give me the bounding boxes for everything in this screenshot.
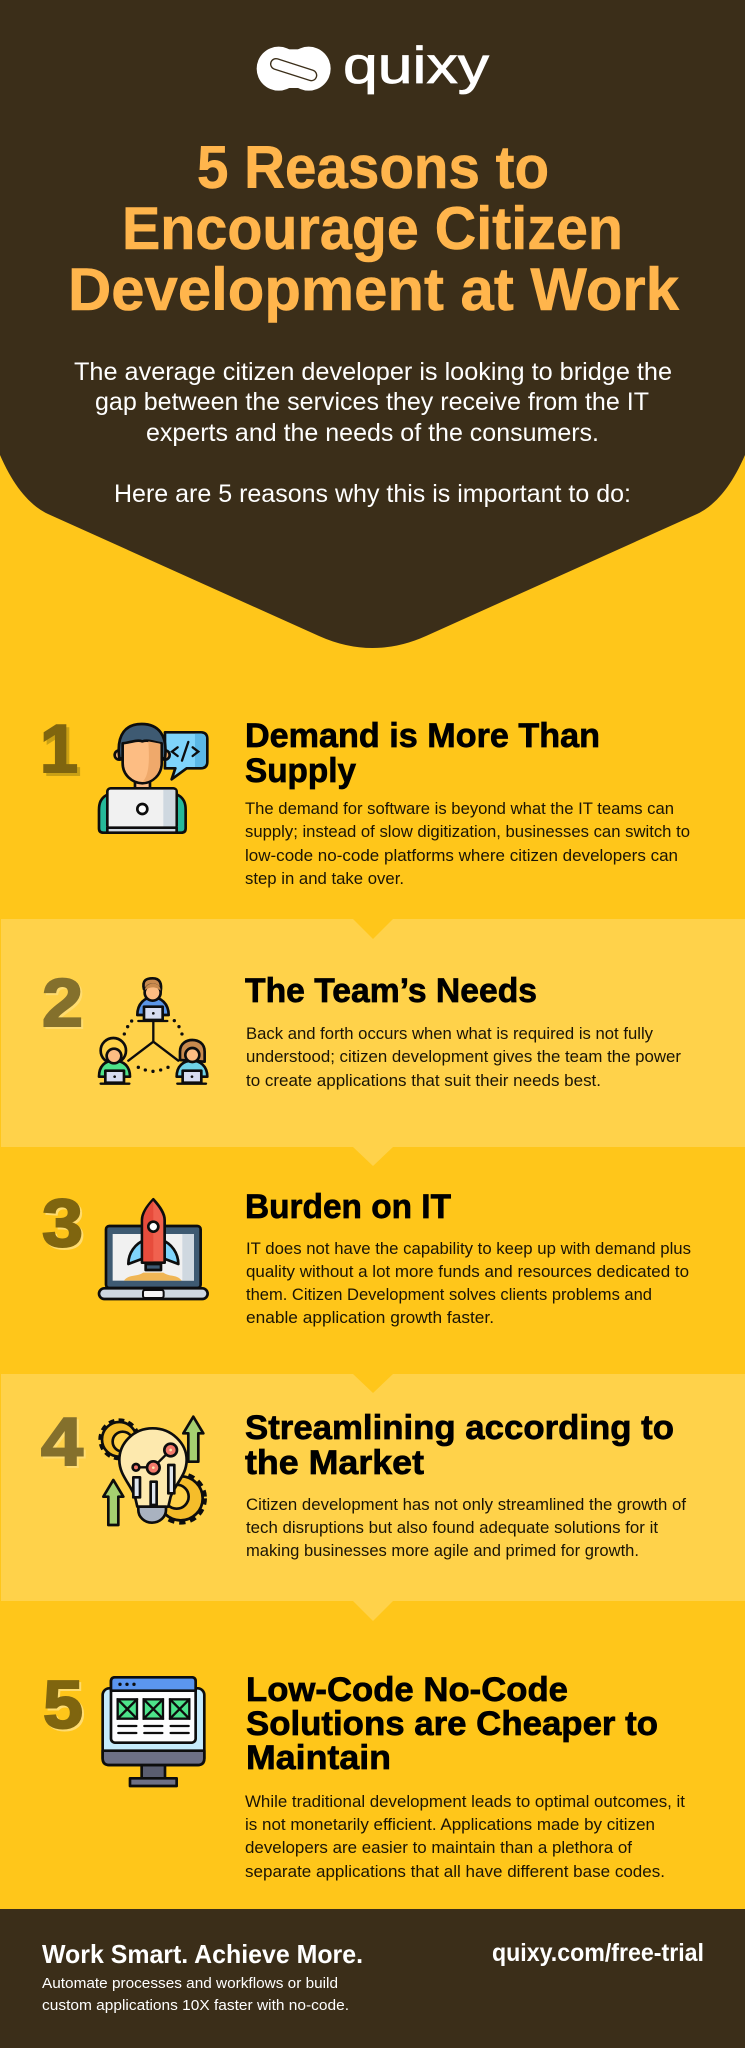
number 5: 5 (43, 1667, 83, 1743)
intro text: gap between the services they receive from the IT (95, 388, 649, 416)
body text: Back and forth occurs when what is required is not fully (246, 1024, 653, 1043)
body text: separate applications that all have different base codes. (245, 1862, 665, 1881)
icon: light bulb with gears and arrows (101, 1417, 204, 1525)
title (68, 134, 680, 323)
body text: to create applications that suit their needs best. (246, 1071, 601, 1090)
number 3: 3 (44, 1187, 85, 1263)
number 2: 2 (44, 967, 85, 1043)
intro text: The average citizen developer is looking to bridge the (74, 358, 672, 386)
heading (246, 1671, 658, 1777)
body text: The demand for software is beyond what the IT teams can (245, 799, 674, 818)
icon: developer with laptop (99, 724, 207, 833)
body text: While traditional development leads to optimal outcomes, it (245, 1792, 685, 1811)
title: Encourage Citizen (122, 195, 623, 262)
number 1: 1 (40, 711, 78, 787)
arrow: down from reason 4 (353, 1601, 393, 1621)
footer description (42, 1975, 349, 2014)
arrow: down from reason 2 (353, 1147, 393, 1166)
body text: supply; instead of slow digitization, businesses can switch to (245, 822, 690, 841)
body text: quality without a lot more funds and resources dedicated to (246, 1262, 689, 1281)
number 5: 5 (45, 1669, 85, 1745)
icon: quixy link mark (257, 47, 331, 91)
heading (245, 1409, 674, 1482)
body text: making businesses more agile and primed for growth. (246, 1541, 639, 1560)
heading: Maintain (246, 1739, 391, 1777)
footer tagline: Work Smart. Achieve More. (42, 1939, 363, 1969)
panel: reason 5 (43, 1601, 685, 1881)
arrow: down from reason 3 (353, 1374, 393, 1393)
title: 5 Reasons to (197, 134, 549, 201)
number 2: 2 (42, 965, 83, 1041)
heading: The Team’s Needs (245, 972, 537, 1010)
intro text (74, 358, 672, 508)
arrow: down from reason 1 (353, 919, 393, 939)
body text: is not monetarily efficient. Applications made by citizen (245, 1815, 655, 1834)
number 4: 4 (41, 1404, 83, 1480)
footer description: custom applications 10X faster with no-code. (42, 1997, 349, 2014)
body text: IT does not have the capability to keep up with demand plus (246, 1239, 691, 1258)
heading: Supply (245, 752, 356, 790)
intro text: experts and the needs of the consumers. (146, 419, 599, 447)
footer link: quixy.com/free-trial (492, 1939, 704, 1967)
body text (246, 1024, 681, 1090)
body text: low-code no-code platforms where citizen developers can (245, 846, 678, 865)
icon: rocket launching from laptop (99, 1199, 208, 1299)
title: Development at Work (68, 256, 680, 323)
body text: enable application growth faster. (246, 1308, 494, 1327)
heading: Streamlining according to (245, 1409, 674, 1447)
panel: footer (0, 1909, 745, 2048)
body text: Citizen development has not only streamlined the growth of (246, 1495, 686, 1514)
heading: the Market (245, 1444, 424, 1482)
logo (257, 37, 489, 95)
intro text: Here are 5 reasons why this is important to do: (114, 480, 631, 508)
heading: Demand is More Than (245, 717, 600, 755)
body text (246, 1239, 691, 1327)
panel: header (0, 0, 745, 648)
logo wordmark: quixy (343, 37, 489, 95)
icon: connected team (99, 978, 207, 1084)
heading: Solutions are Cheaper to (246, 1705, 658, 1743)
body text: developers are easier to maintain than a plethora of (245, 1838, 632, 1857)
panel: reason 3 (42, 1147, 691, 1327)
body text (245, 799, 690, 888)
icon: monitor with wireframe (103, 1677, 204, 1786)
body text: step in and take over. (245, 869, 404, 888)
heading: Burden on IT (245, 1188, 451, 1226)
footer description: Automate processes and workflows or build (42, 1975, 338, 1992)
body text: tech disruptions but also found adequate solutions for it (246, 1518, 658, 1537)
body text (246, 1495, 686, 1560)
number 1: 1 (43, 714, 81, 790)
panel: reason 1 (40, 711, 690, 888)
heading: Low-Code No-Code (246, 1671, 568, 1709)
body text: understood; citizen development gives the team the power (246, 1047, 681, 1066)
panel: reason 4 (1, 1374, 745, 1601)
body text (245, 1792, 685, 1881)
body text: them. Citizen Development solves clients problems and (246, 1285, 652, 1304)
number 3: 3 (42, 1185, 83, 1261)
heading (245, 717, 600, 790)
number 4: 4 (43, 1406, 85, 1482)
panel: reason 2 (1, 919, 745, 1147)
